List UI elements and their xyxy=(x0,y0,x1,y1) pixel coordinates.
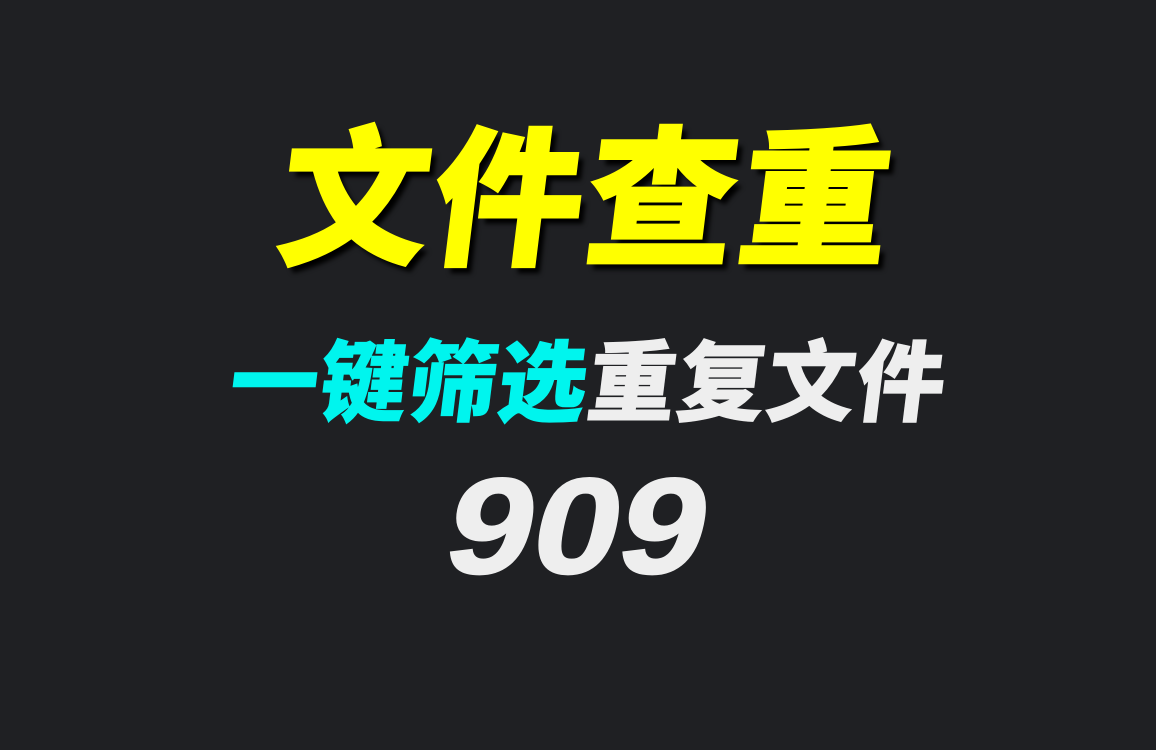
title: 文件查重 xyxy=(270,117,905,285)
subtitle: 一键筛选重复文件 xyxy=(224,334,953,433)
episode number: 909 xyxy=(433,450,724,602)
